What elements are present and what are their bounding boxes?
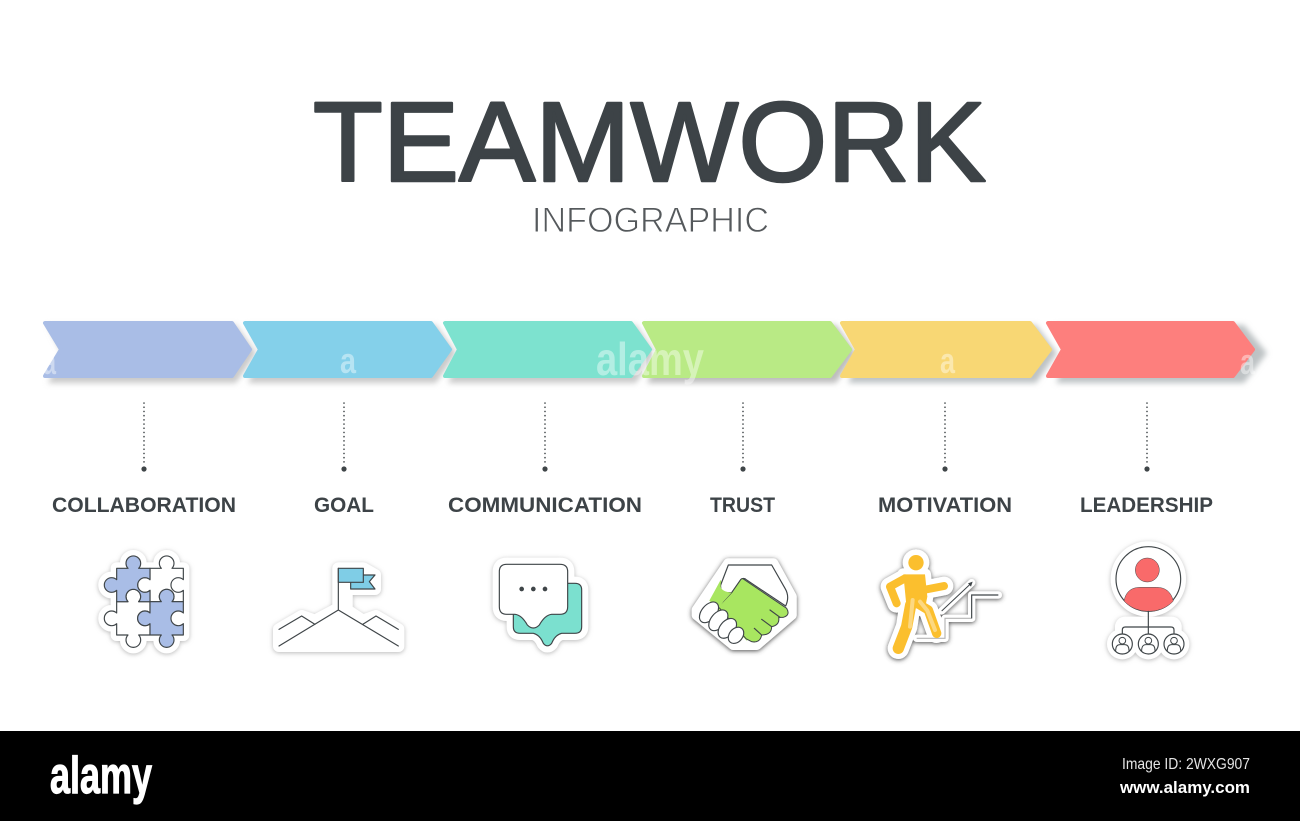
icon: puzzle pieces [104, 556, 183, 647]
label: motivation: MOTIVATION [878, 494, 1012, 517]
watermark: small letters on chevrons: a [340, 340, 357, 381]
icon: speech bubbles [499, 564, 582, 646]
title: TEAMWORK [313, 79, 986, 205]
chevron: motivation [842, 323, 1057, 383]
image id: Image ID: 2WXG907 [1122, 756, 1250, 773]
label: goal: GOAL [314, 494, 374, 517]
chevron: trust [644, 323, 856, 383]
icon: leader with team [1107, 541, 1189, 659]
icon: person climbing stairs [890, 549, 998, 648]
connector: trust [740, 403, 746, 472]
watermark: small letters on chevrons [43, 340, 1256, 382]
label: communication: COMMUNICATION [448, 494, 642, 517]
chevron timeline [45, 323, 1267, 383]
chevron: leadership [1048, 323, 1267, 383]
connector: motivation [942, 403, 948, 472]
footer logo: alamy [50, 747, 152, 805]
connector: goal [341, 403, 347, 472]
icon: handshake [696, 563, 792, 647]
connector: communication [542, 403, 548, 472]
chevron: collaboration [45, 323, 256, 383]
watermark: small letters on chevrons: a [43, 341, 57, 382]
connector: leadership [1144, 403, 1150, 472]
watermark: small letters on chevrons: a [1240, 341, 1256, 382]
website: www.alamy.com [1119, 778, 1250, 797]
icon: mountain with flag [279, 568, 398, 646]
label: trust: TRUST [710, 494, 775, 517]
footer bar [0, 731, 1300, 821]
connector: collaboration [141, 403, 147, 472]
watermark: centre alamy: alamy [596, 333, 704, 385]
watermark: small letters on chevrons: a [940, 340, 956, 381]
label: leadership: LEADERSHIP [1080, 494, 1213, 517]
label: collaboration: COLLABORATION [52, 494, 236, 517]
subtitle: INFOGRAPHIC [532, 201, 769, 240]
chevron: communication [445, 323, 655, 383]
chevron: goal [245, 323, 456, 383]
